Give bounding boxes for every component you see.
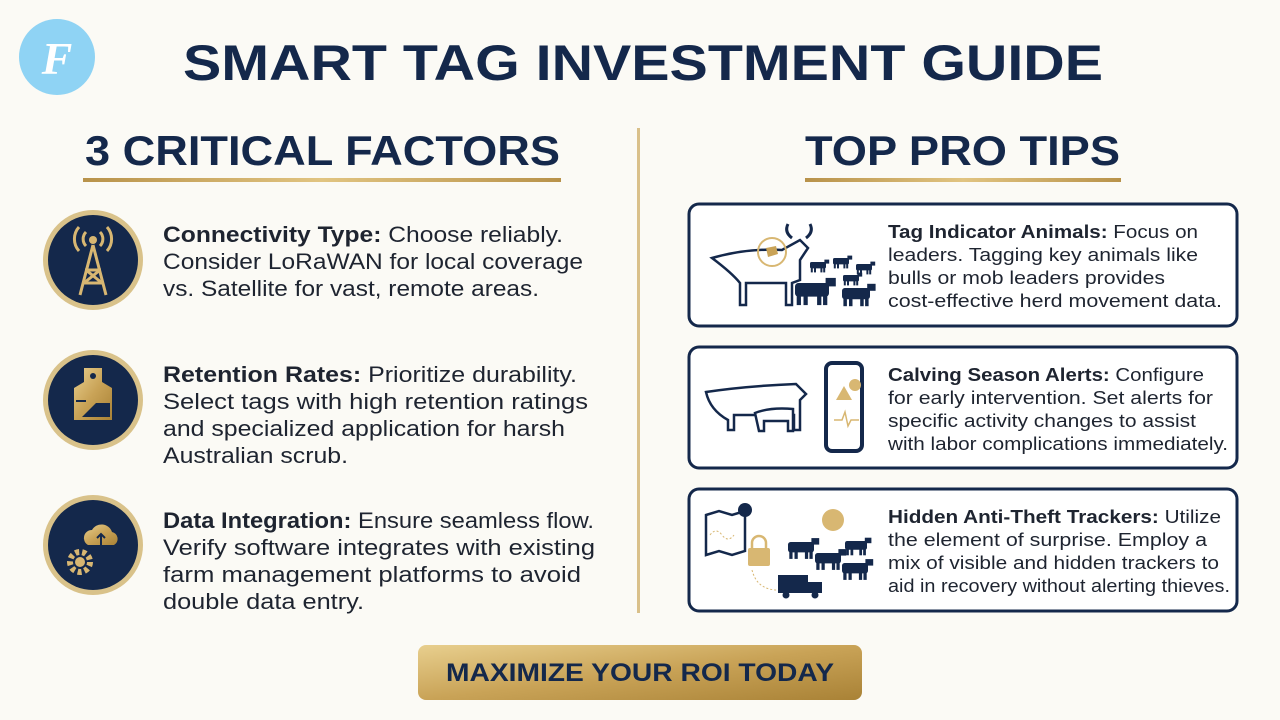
heading: top pro tips: TOP PRO TIPS xyxy=(805,127,1120,174)
button: maximize ROI: MAXIMIZE YOUR ROI TODAY xyxy=(446,659,834,687)
factor 3: data integration: farm management platforms to avoid xyxy=(163,562,581,587)
icon: map, lock, herd, truck xyxy=(706,503,873,598)
tip 2 xyxy=(689,347,1237,468)
logo: F xyxy=(41,33,72,84)
factor 2: retention: Select tags with high retention ratings xyxy=(163,389,588,414)
icon: cow and phone xyxy=(706,363,862,451)
factor 3: data integration: Verify software integrates with existing xyxy=(163,535,595,560)
heading: 3 critical factors: 3 CRITICAL FACTORS xyxy=(85,127,560,174)
icon: bull and herd xyxy=(712,224,876,306)
tip 2: with labor complications immediately. xyxy=(887,434,1228,454)
factor 2: retention: and specialized application for harsh xyxy=(163,416,565,441)
icon: ear tag xyxy=(43,350,143,450)
factor 3: data integration xyxy=(43,495,601,614)
factor 1: connectivity: Consider LoRaWAN for local coverage xyxy=(163,249,583,274)
factor 2: retention: Australian scrub. xyxy=(163,443,348,468)
tip 1 xyxy=(689,204,1237,326)
tip 1: cost-effective herd movement data. xyxy=(888,291,1222,311)
tip 1: Tag Indicator Animals: Focus on xyxy=(888,222,1187,242)
factor 2: retention: Retention Rates: Prioritize durability. xyxy=(163,362,552,387)
tip 2: Calving Season Alerts: Configure xyxy=(888,365,1193,385)
icon: cloud gear xyxy=(43,495,143,595)
tip 1: leaders. Tagging key animals like xyxy=(888,245,1198,265)
factor 1: connectivity: Connectivity Type: Choose reliably. xyxy=(163,222,544,247)
logo xyxy=(19,19,95,95)
factor 1: connectivity: vs. Satellite for vast, remote areas. xyxy=(163,276,539,301)
tip 2: for early intervention. Set alerts for xyxy=(888,388,1213,408)
factor 2: retention xyxy=(43,350,594,468)
button: maximize ROI xyxy=(418,645,862,700)
factor 3: data integration: double data entry. xyxy=(163,589,364,614)
tip 2: specific activity changes to assist xyxy=(888,411,1196,431)
factor 1: connectivity xyxy=(43,210,589,310)
tip 3: aid in recovery without alerting thieves. xyxy=(888,576,1230,596)
tip 3 xyxy=(689,489,1237,611)
tip 1: bulls or mob leaders provides xyxy=(888,268,1165,288)
icon: tower xyxy=(43,210,143,310)
tip 3: mix of visible and hidden trackers to xyxy=(888,553,1219,573)
tip 3: Hidden Anti-Theft Trackers: Utilize xyxy=(888,507,1213,527)
tip 3: the element of surprise. Employ a xyxy=(888,530,1208,550)
title: SMART TAG INVESTMENT GUIDE xyxy=(183,35,1103,91)
factor 3: data integration: Data Integration: Ensure seamless flow. xyxy=(163,508,576,533)
